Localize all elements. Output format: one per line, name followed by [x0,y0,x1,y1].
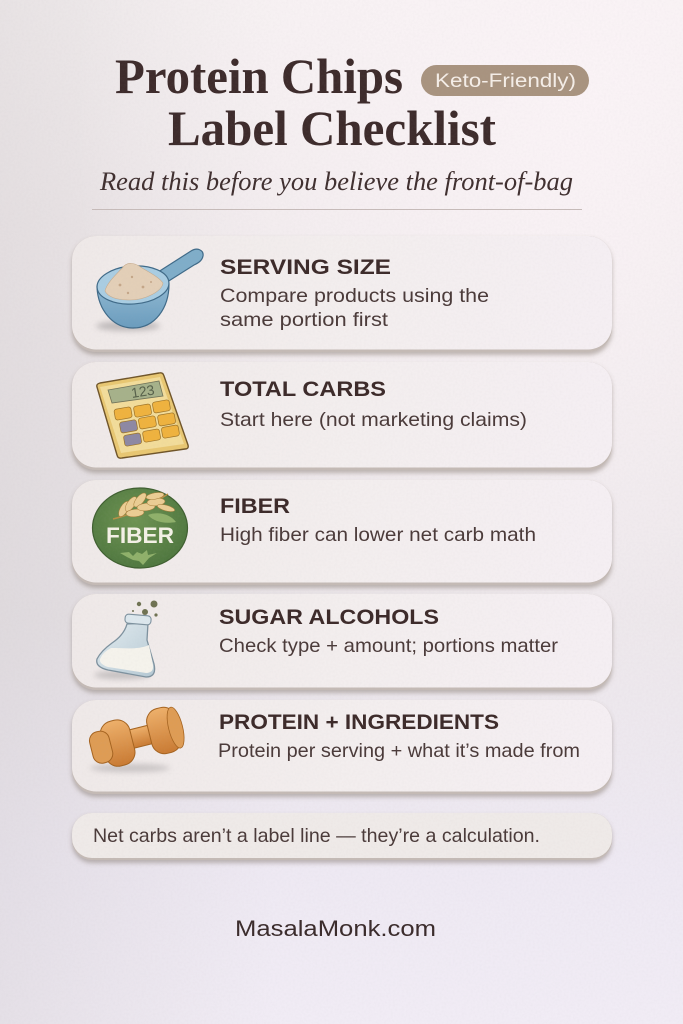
description: High fiber can lower net carb math [220,524,536,546]
description: Protein per serving + what it’s made from [218,740,580,762]
heading: PROTEIN + INGREDIENTS [219,711,499,734]
heading: SERVING SIZE [220,256,391,279]
header divider [92,209,582,210]
panel: protein + ingredients [72,700,612,794]
icon: calculator: 123 [130,381,156,401]
callout: net carbs [72,813,612,860]
title [115,48,496,156]
tag: keto-friendly [421,65,589,96]
callout: net carbs: Net carbs aren’t a label line — they’re a calculation. [93,825,540,847]
description: Start here (not marketing claims) [220,409,527,431]
icon: fiber badge [92,488,188,568]
footer: website: MasalaMonk.com [235,916,436,941]
icon: flask [94,600,158,679]
panel: serving size [72,236,612,352]
panel: total carbs [72,362,612,470]
icon: scoop [96,249,203,331]
panel: fiber [72,480,612,585]
subtitle: Read this before you believe the front-of-bag [99,167,573,196]
icon: fiber badge: FIBER [106,523,174,548]
panel: sugar alcohols [72,594,612,690]
icon: calculator [97,373,188,458]
heading: FIBER [220,495,290,518]
description: Compare products using the [220,285,489,307]
title: Label Checklist [168,100,496,156]
title: Protein Chips [115,48,403,104]
tag: keto-friendly: Keto-Friendly) [435,71,576,92]
heading: SUGAR ALCOHOLS [219,606,439,629]
heading: TOTAL CARBS [220,378,386,401]
description: same portion first [220,309,389,331]
icon: dumbbell [86,704,188,772]
description: Check type + amount; portions matter [219,635,559,657]
